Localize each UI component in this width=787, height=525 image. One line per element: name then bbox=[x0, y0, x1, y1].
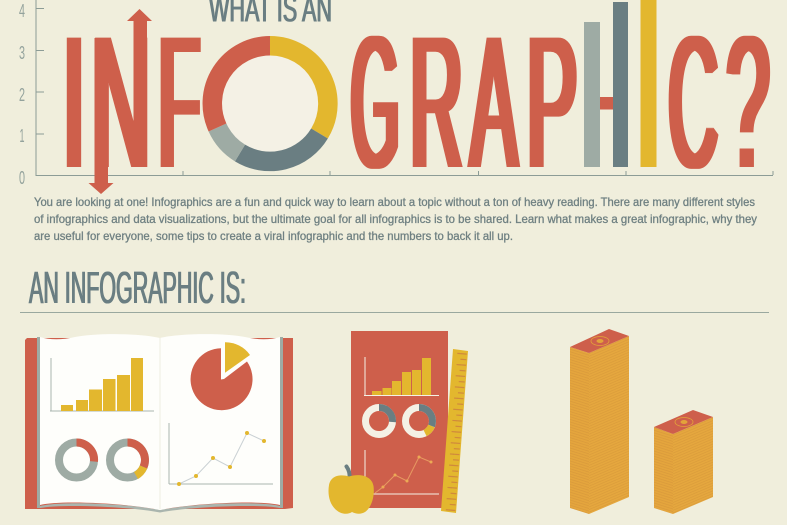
chart axes behind the title bbox=[36, 0, 773, 176]
sheet donut charts bbox=[366, 407, 432, 434]
intro paragraph: are useful for everyone, some tips to create a viral infographic and the numbers to back it all up. bbox=[34, 229, 513, 243]
y axis labels: 2 bbox=[19, 85, 25, 105]
y axis labels: 4 bbox=[19, 1, 25, 21]
bar chart bbox=[50, 358, 154, 411]
y axis labels: 1 bbox=[20, 126, 24, 146]
icon: tall money stack bbox=[570, 329, 629, 514]
title letters: INF G RAP C ? bbox=[63, 0, 769, 208]
sheet bar chart bbox=[364, 357, 439, 396]
bar letter I bbox=[640, 0, 656, 167]
bar letter H bbox=[584, 2, 628, 167]
donut letter O bbox=[212, 46, 328, 161]
title letters: INF G RAP C ?: R bbox=[410, 0, 463, 208]
title letters: INF G RAP C ?: P bbox=[527, 0, 577, 208]
title letters: INF G RAP C ?: ? bbox=[727, 0, 769, 208]
donut charts bbox=[59, 442, 145, 478]
intro paragraph: You are looking at one! Infographics are a fun and quick way to learn about a topic without a ton of heavy reading. There are many different styles bbox=[34, 195, 755, 209]
title letters: INF G RAP C ?: G bbox=[351, 0, 399, 207]
icon: red chart sheet with apple and ruler bbox=[328, 331, 468, 514]
y axis labels: 0 bbox=[19, 168, 25, 188]
line chart bbox=[169, 423, 273, 486]
arrow: N right stem pointing up bbox=[127, 9, 152, 167]
y axis labels: 3 bbox=[19, 43, 25, 63]
y axis labels bbox=[19, 1, 25, 188]
text: AN INFOGRAPHIC IS: bbox=[29, 262, 246, 313]
arrow: N left stem pointing down bbox=[88, 38, 114, 194]
icon: short money stack bbox=[654, 410, 713, 514]
title letters: INF G RAP C ?: C bbox=[669, 0, 718, 207]
title letters: INF G RAP C ?: F bbox=[159, 0, 200, 207]
title letters: INF G RAP C ?: A bbox=[470, 0, 517, 208]
sheet line chart bbox=[365, 450, 439, 494]
intro paragraph: of infographics and data visualizations, but the ultimate goal for all infographics is to be shared. Learn what makes a great infographic, why they bbox=[34, 212, 757, 226]
icon: ruler bbox=[441, 349, 468, 513]
icon: open book with charts bbox=[25, 334, 293, 512]
pie chart bbox=[191, 342, 253, 410]
title letters: INF G RAP C ?: I bbox=[63, 0, 85, 207]
intro paragraph bbox=[34, 195, 757, 243]
title letters: INF G RAP C ?: N bbox=[92, 0, 150, 207]
icon: apple bbox=[328, 466, 374, 514]
